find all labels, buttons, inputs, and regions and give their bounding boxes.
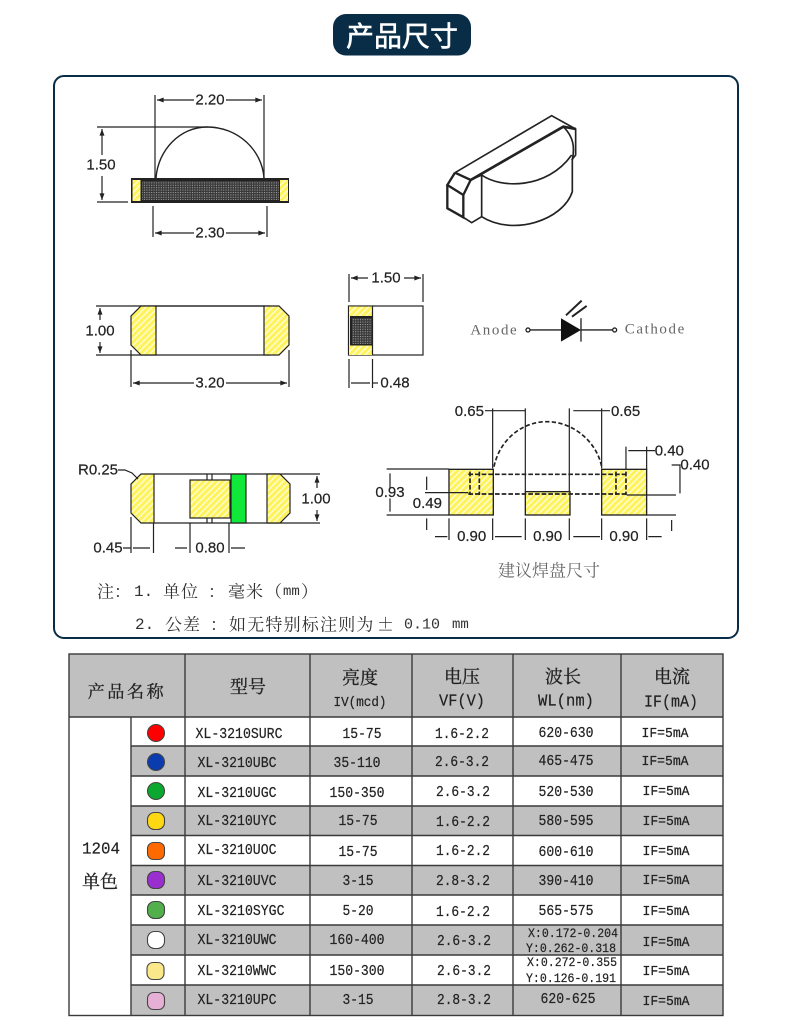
column: brightness: 35-110	[334, 756, 380, 772]
drawing: bottom view: 1.00	[85, 322, 115, 340]
notes: 公差	[165, 610, 201, 636]
notes: ：	[208, 578, 225, 602]
column: voltage: 2.6-3.2	[435, 755, 489, 771]
table header: WL(nm)	[538, 692, 594, 712]
table header: 电流	[654, 663, 690, 689]
column: current: IF=5mA	[642, 784, 690, 800]
drawing: isometric LED	[447, 116, 576, 225]
column: current: IF=5mA	[642, 754, 689, 770]
column: wavelength: Y:0.126-0.191	[526, 972, 616, 986]
drawing: top view with dome	[86, 92, 289, 242]
column: model: XL-3210UVC	[198, 874, 277, 890]
column: brightness: 150-300	[330, 964, 384, 980]
column: model: XL-3210UGC	[198, 786, 277, 802]
notes: 如无特别标注则为	[229, 610, 375, 636]
table header: 型号	[230, 673, 266, 699]
column: current: IF=5mA	[642, 904, 690, 920]
column: brightness: 3-15	[342, 874, 374, 890]
drawing: cross-section footprint view	[78, 462, 331, 556]
column: wavelength: X:0.172-0.204	[528, 927, 618, 941]
notes	[97, 578, 469, 636]
column: brightness: 15-75	[338, 845, 378, 861]
notes: （	[265, 578, 282, 602]
column: current: IF=5mA	[642, 994, 690, 1010]
drawing: recommended solder pad layout: 建议焊盘尺寸	[498, 556, 600, 581]
column: current: IF=5mA	[642, 935, 690, 951]
drawing: bottom view	[85, 306, 289, 392]
column: model: XL-3210UYC	[198, 814, 277, 830]
notes: 毫米	[228, 578, 264, 602]
column: voltage: 2.6-3.2	[437, 964, 491, 980]
column: brightness: 15-75	[342, 727, 382, 743]
drawing: recommended solder pad layout: 0.65	[611, 403, 640, 420]
drawing: top view with dome: 2.30	[195, 224, 225, 242]
column: wavelength: 600-610	[538, 845, 594, 861]
column: voltage: 2.8-3.2	[437, 993, 491, 1009]
column: voltage: 1.6-2.2	[436, 844, 490, 860]
column: brightness: 150-350	[330, 786, 384, 802]
column: wavelength: 565-575	[538, 904, 594, 920]
notes: mm	[283, 584, 300, 600]
drawing: side view: 1.50	[371, 270, 401, 286]
table header: 亮度	[342, 664, 378, 690]
drawing: recommended solder pad layout: 0.90	[609, 528, 639, 545]
drawing: recommended solder pad layout: 0.40	[655, 442, 684, 459]
icon: LED circuit symbol	[470, 301, 686, 342]
column: wavelength: 390-410	[538, 874, 594, 890]
notes: 单位	[163, 578, 199, 602]
column: current: IF=5mA	[642, 964, 690, 980]
column: brightness: 160-400	[330, 933, 384, 949]
column: voltage: 1.6-2.2	[436, 905, 490, 921]
column: model: XL-3210UPC	[198, 993, 277, 1009]
title: 产品尺寸: 产品尺寸	[346, 15, 458, 55]
notes: 2.	[135, 616, 154, 634]
drawing: cross-section footprint view: 0.45	[93, 540, 123, 556]
notes: mm	[452, 617, 469, 633]
column: current: IF=5mA	[642, 873, 690, 889]
column: voltage: 2.8-3.2	[436, 874, 490, 890]
notes: 注：	[97, 578, 131, 602]
drawing: side view: 0.48	[380, 374, 410, 392]
drawing: top view with dome: 2.20	[195, 92, 225, 108]
drawing: cross-section footprint view: 0.80	[195, 540, 225, 556]
category label: 1204 单色: 单色	[82, 868, 118, 894]
notes: ±	[377, 610, 394, 636]
column: wavelength: 465-475	[538, 754, 594, 770]
notes: 1.	[134, 583, 153, 601]
column: brightness: 3-15	[342, 993, 374, 1009]
column: voltage: 2.6-3.2	[436, 785, 490, 801]
table grid	[69, 654, 723, 1016]
drawing: cross-section footprint view: R0.25	[78, 462, 118, 478]
drawing: top view with dome: 1.50	[86, 156, 116, 174]
column: wavelength: Y:0.262-0.318	[526, 942, 616, 956]
column: voltage: 1.6-2.2	[435, 727, 489, 743]
table header: 电压	[444, 663, 480, 689]
column: wavelength: X:0.272-0.355	[527, 956, 617, 970]
drawing: side view	[348, 270, 423, 392]
table header: 波长	[545, 663, 581, 689]
column: voltage: 2.6-3.2	[437, 934, 491, 950]
table header: IF(mA)	[644, 694, 698, 712]
notes: ）	[301, 578, 318, 602]
column: wavelength: 620-630	[538, 726, 594, 742]
column: brightness: 5-20	[342, 904, 374, 920]
table: product specifications	[69, 654, 723, 1016]
column: model: XL-3210SURC	[196, 727, 283, 743]
icon: LED circuit symbol: Cathode	[625, 321, 686, 337]
column: wavelength: 620-625	[540, 992, 596, 1008]
notes: ：	[210, 610, 227, 636]
drawing: recommended solder pad layout: 0.93	[375, 484, 405, 501]
drawing: recommended solder pad layout: 0.90	[533, 528, 562, 545]
column: model: XL-3210UWC	[198, 933, 277, 949]
column: model: XL-3210UBC	[198, 756, 277, 772]
drawing: cross-section footprint view: 1.00	[301, 490, 331, 508]
column: current: IF=5mA	[642, 814, 690, 830]
drawing: bottom view: 3.20	[195, 374, 225, 392]
table header: 产品名称	[88, 678, 166, 702]
column: current: IF=5mA	[642, 844, 690, 860]
table header: VF(V)	[439, 692, 485, 712]
column: model	[196, 727, 285, 1009]
column: voltage: 1.6-2.2	[436, 815, 490, 831]
drawing: recommended solder pad layout: 0.65	[455, 403, 484, 420]
table row shading	[131, 746, 723, 1015]
column: model: XL-3210WWC	[198, 964, 277, 980]
column: current: IF=5mA	[642, 726, 689, 742]
panel: product dimensions	[54, 76, 738, 638]
column: model: XL-3210SYGC	[198, 904, 285, 920]
column: brightness	[330, 727, 384, 1009]
column: current	[642, 726, 690, 1010]
category label: 1204 单色	[82, 840, 120, 894]
table header	[69, 654, 723, 717]
icon: LED circuit symbol: Anode	[470, 323, 518, 339]
column: wavelength: 520-530	[538, 785, 594, 801]
drawing: recommended solder pad layout: 0.40	[680, 456, 710, 473]
column: voltage	[435, 727, 491, 1009]
column: model: XL-3210UOC	[198, 843, 277, 859]
column: wavelength	[526, 726, 618, 1008]
drawing: recommended solder pad layout: 0.90	[457, 528, 486, 545]
category label: 1204 单色: 1204	[82, 840, 120, 860]
column: brightness: 15-75	[338, 814, 378, 830]
column: wavelength: 580-595	[538, 814, 594, 830]
colour swatches	[147, 724, 164, 1010]
drawing: recommended solder pad layout	[375, 403, 710, 581]
table header: IV(mcd)	[334, 695, 386, 711]
notes: 0.10	[404, 616, 440, 634]
drawing: recommended solder pad layout: 0.49	[413, 495, 442, 512]
